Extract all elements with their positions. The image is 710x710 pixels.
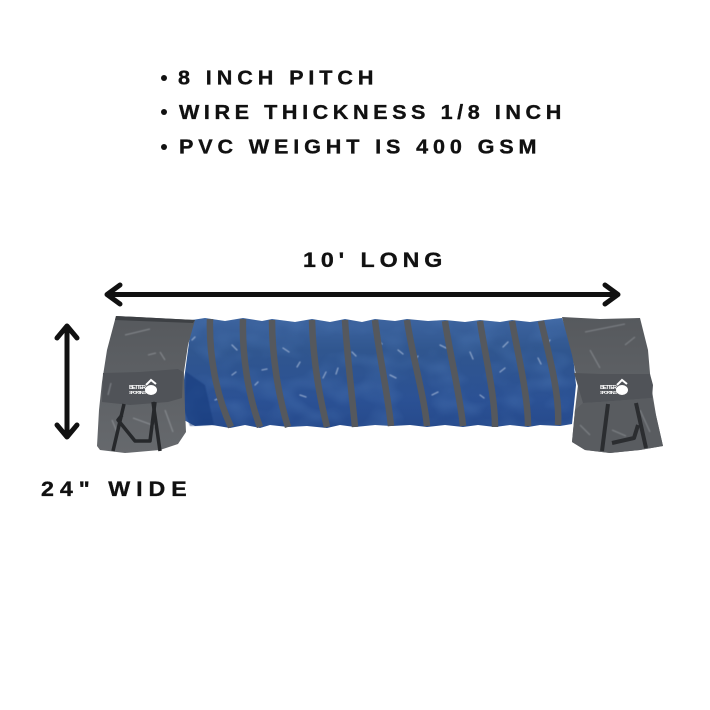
left bag: top flap edge [115,316,195,323]
left bag: front pocket flap [102,369,183,405]
label: length: 10' LONG [303,248,442,272]
left bag: logo: SPORTING [129,390,146,395]
right bag: glossy highlights [580,324,650,436]
bullet: wire thickness: WIRE THICKNESS 1/8 INCH [179,102,561,124]
tunnel body: spiral wire bands [210,319,558,427]
right storage bag [562,317,663,453]
right bag: lower pocket [572,398,663,453]
tunnel body: dark shaded fold at the left [184,372,214,426]
label: width: 24" WIDE [41,477,187,501]
bullet: 8 inch pitch: 8 INCH PITCH [178,67,373,89]
arrow: length dimension [107,285,618,304]
left bag: handles [113,402,160,451]
bullet list: tunnel specifications [161,67,561,158]
right bag: handles [602,403,646,451]
left bag: glossy highlights [108,329,173,432]
bullet: PVC weight: PVC WEIGHT IS 400 GSM [179,136,536,158]
arrow: width dimension [57,326,77,437]
left bag: logo [129,380,157,395]
right bag: logo: SPORTING [600,390,617,395]
right bag: logo: BETTER [600,385,617,391]
left bag: logo: BETTER [129,385,146,391]
tunnel body: blue PVC [184,318,576,428]
left storage bag [97,316,195,453]
right bag: front pocket flap [574,373,653,403]
right bag: logo [600,380,628,395]
tunnel product illustration [97,316,663,453]
tunnel body: glossy highlights [192,337,550,400]
